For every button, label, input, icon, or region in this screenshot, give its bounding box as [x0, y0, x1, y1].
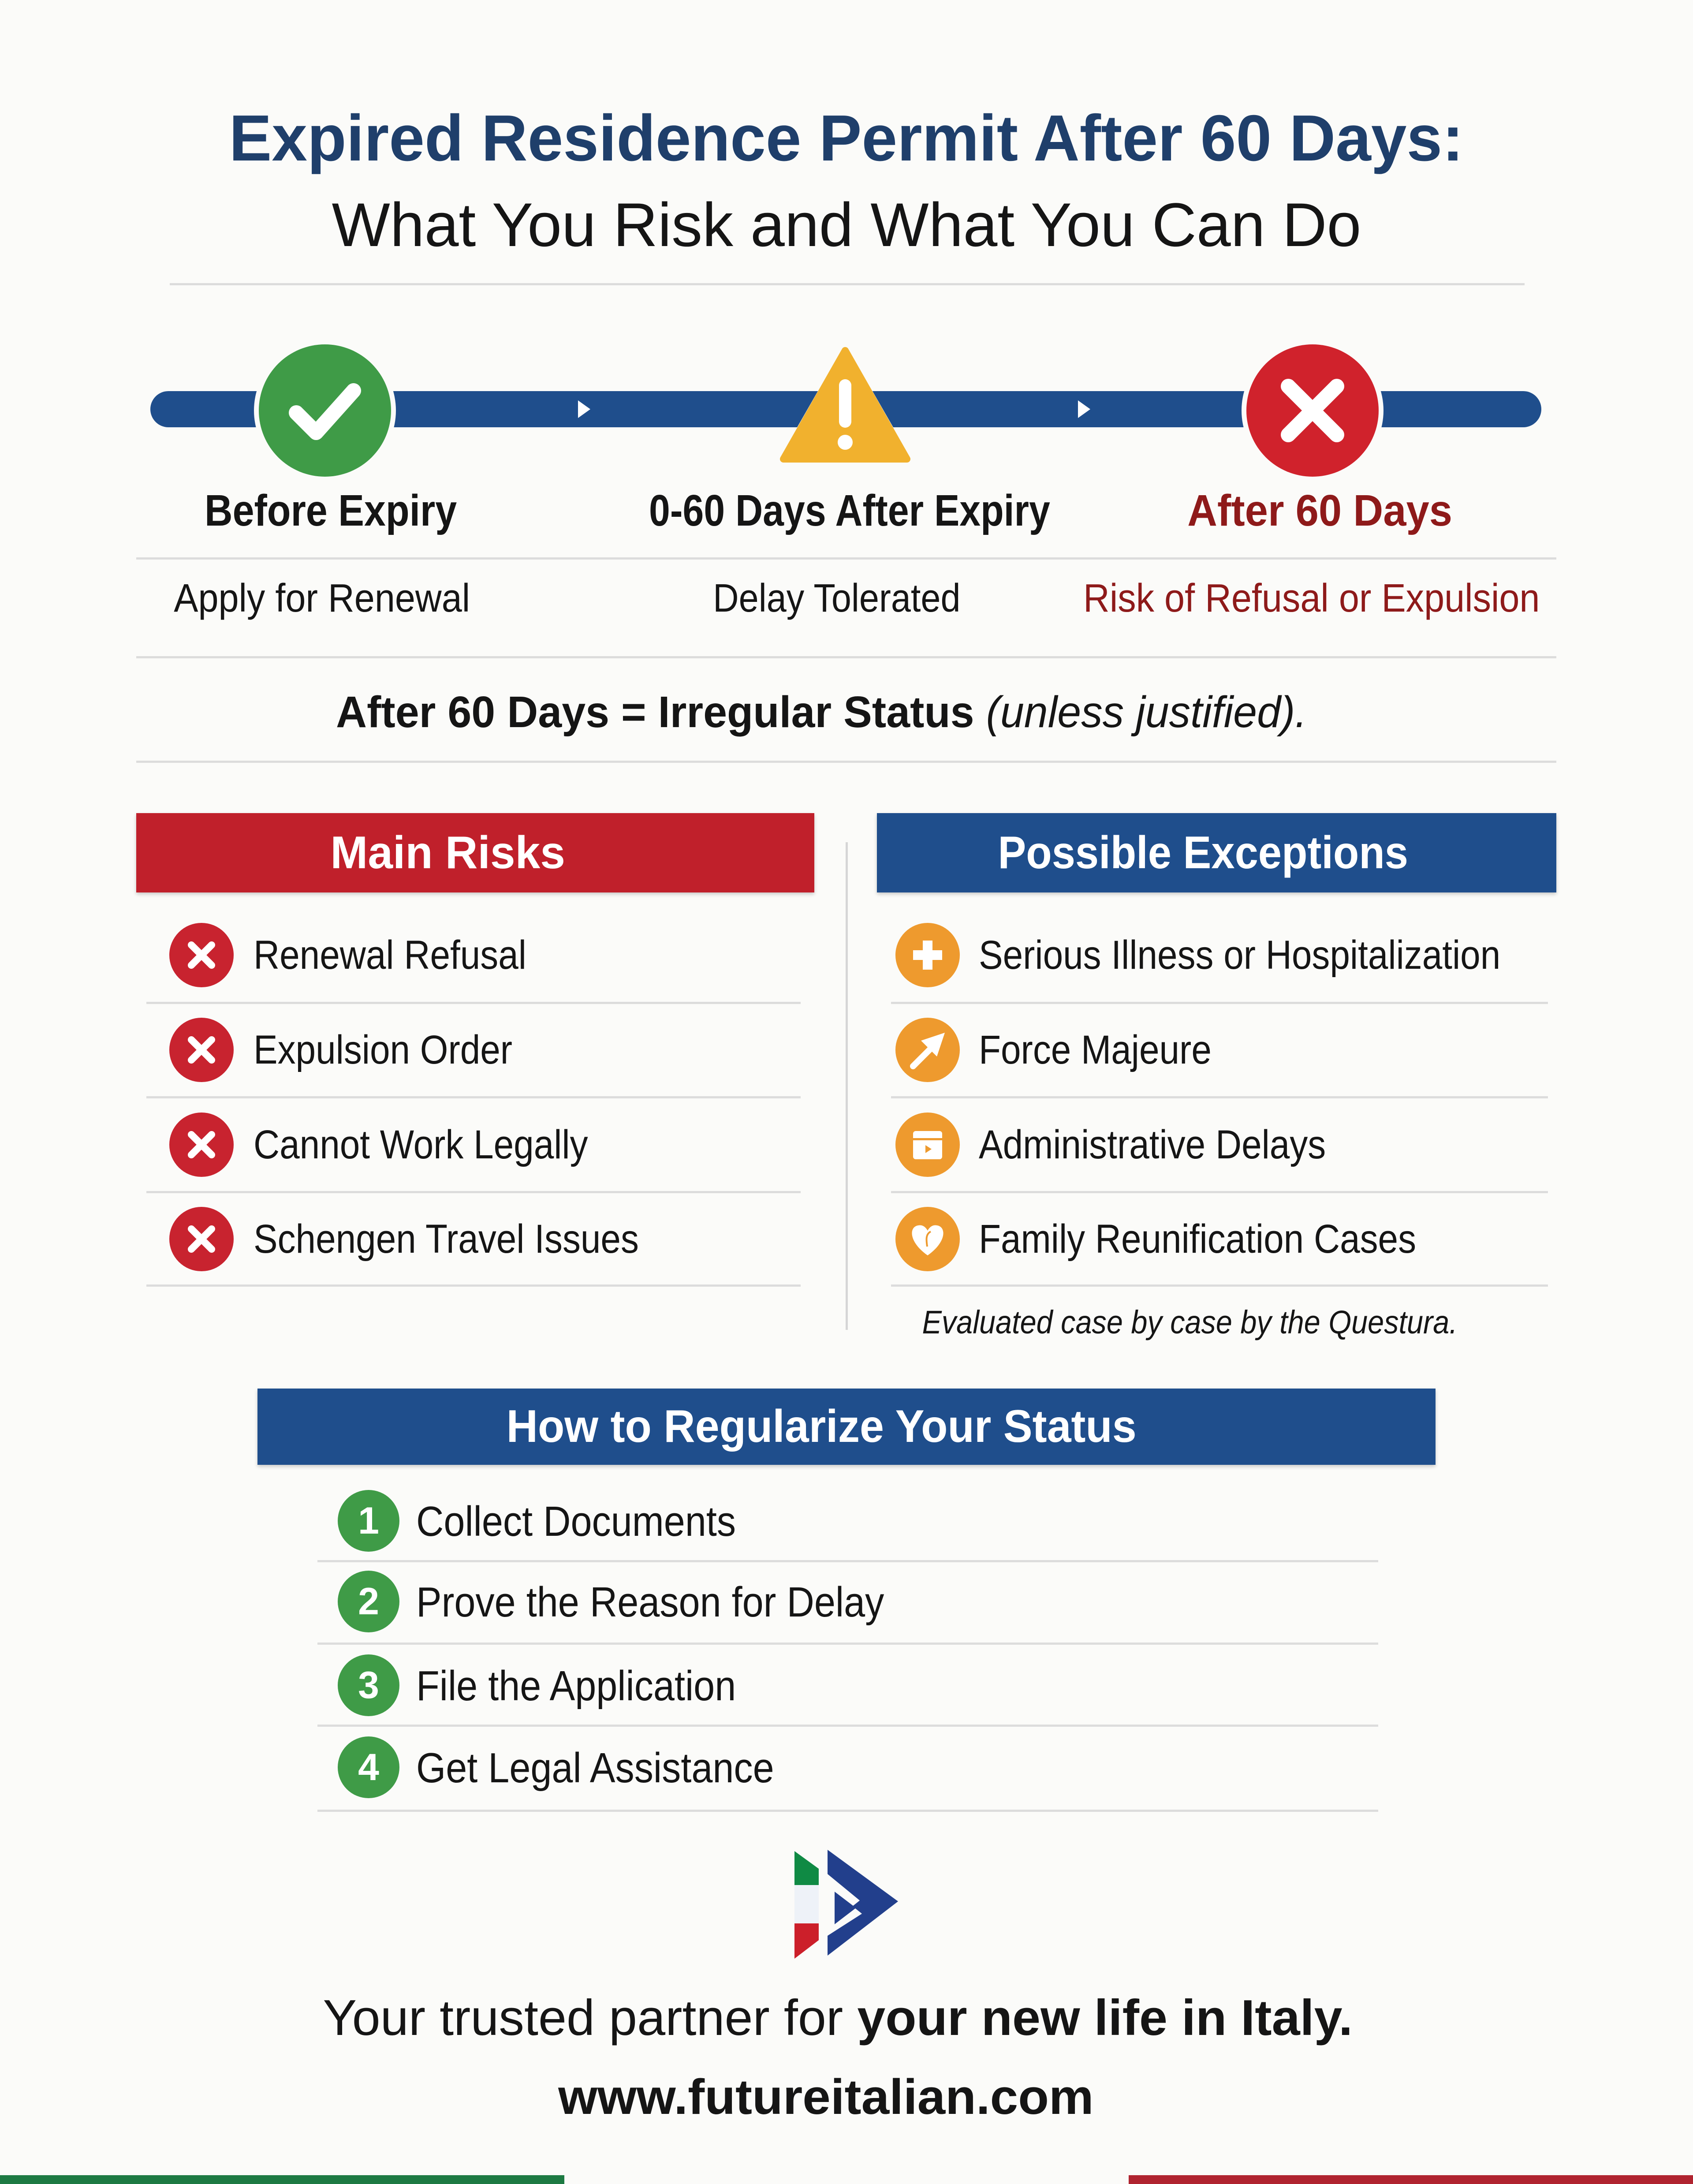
panel: possible exceptions	[877, 813, 1556, 1347]
exception: force majeure: Force Majeure	[979, 1027, 1212, 1072]
stage descriptions: Risk of Refusal or Expulsion	[1083, 576, 1540, 620]
exception: serious illness	[891, 911, 1548, 999]
risk: expulsion order: Expulsion Order	[254, 1027, 512, 1072]
step 2: Prove the Reason for Delay	[416, 1579, 884, 1626]
exception: administrative delays	[891, 1101, 1548, 1189]
risk: schengen travel issues	[146, 1195, 801, 1283]
stage descriptions: Apply for Renewal	[174, 576, 470, 620]
stage labels: Before Expiry	[205, 486, 457, 535]
icon: green check	[254, 340, 396, 482]
step 3	[317, 1641, 1378, 1729]
exception: family reunification: Family Reunification Cases	[979, 1217, 1416, 1262]
icon: red cross	[1242, 340, 1383, 482]
heading: main risks: Main Risks	[331, 827, 565, 878]
risk: expulsion order	[146, 1006, 801, 1094]
step 1	[317, 1477, 1378, 1565]
step 2	[317, 1557, 1378, 1646]
key statement: After 60 Days = Irregular Status (unless justified).	[336, 687, 1307, 737]
step 2: 2	[358, 1580, 379, 1623]
panel: how to regularize	[257, 1389, 1436, 1816]
step 1: Collect Documents	[416, 1498, 736, 1545]
arrow marker 1	[578, 400, 590, 418]
stage labels: After 60 Days	[1188, 486, 1452, 535]
step 4	[317, 1723, 1378, 1811]
risk: schengen travel issues: Schengen Travel Issues	[254, 1217, 639, 1262]
heading: main risks	[136, 813, 814, 892]
arrow marker 2	[1078, 400, 1090, 418]
timeline	[150, 340, 1541, 481]
heading: how to regularize	[257, 1389, 1436, 1465]
title	[0, 106, 1693, 256]
exception: serious illness: Serious Illness or Hospitalization	[979, 933, 1500, 978]
note: Evaluated case by case by the Questura.	[922, 1304, 1458, 1340]
exception: administrative delays: Administrative Delays	[979, 1122, 1326, 1167]
timeline bar	[150, 391, 1541, 427]
risk: renewal refusal: Renewal Refusal	[254, 933, 526, 978]
panel: main risks	[136, 813, 814, 1298]
heading: possible exceptions: Possible Exceptions	[998, 827, 1408, 878]
title: What You Risk and What You Can Do	[332, 190, 1361, 259]
stage descriptions: Delay Tolerated	[713, 576, 961, 620]
step 4: 4	[358, 1746, 379, 1788]
icon: warning triangle	[775, 342, 916, 465]
heading: possible exceptions	[877, 813, 1556, 892]
risk: cannot work legally: Cannot Work Legally	[254, 1122, 588, 1167]
logo	[791, 1848, 902, 1962]
risk: renewal refusal	[146, 911, 801, 999]
risk: cannot work legally	[146, 1101, 801, 1189]
flag bar	[0, 2175, 1693, 2184]
exception: force majeure	[891, 1006, 1548, 1094]
heading: how to regularize: How to Regularize Your Status	[506, 1401, 1137, 1452]
step 3: 3	[358, 1664, 379, 1706]
exception: family reunification	[891, 1195, 1548, 1283]
website: www.futureitalian.com	[558, 2069, 1093, 2124]
step 4: Get Legal Assistance	[416, 1744, 774, 1792]
stage labels: 0-60 Days After Expiry	[649, 486, 1050, 535]
stage descriptions	[0, 579, 1693, 623]
step 1: 1	[358, 1500, 379, 1542]
stage labels	[0, 489, 1693, 541]
step 3: File the Application	[416, 1662, 736, 1710]
title: Expired Residence Permit After 60 Days:	[229, 102, 1464, 175]
tagline: Your trusted partner for your new life in Italy.	[323, 1990, 1353, 2046]
